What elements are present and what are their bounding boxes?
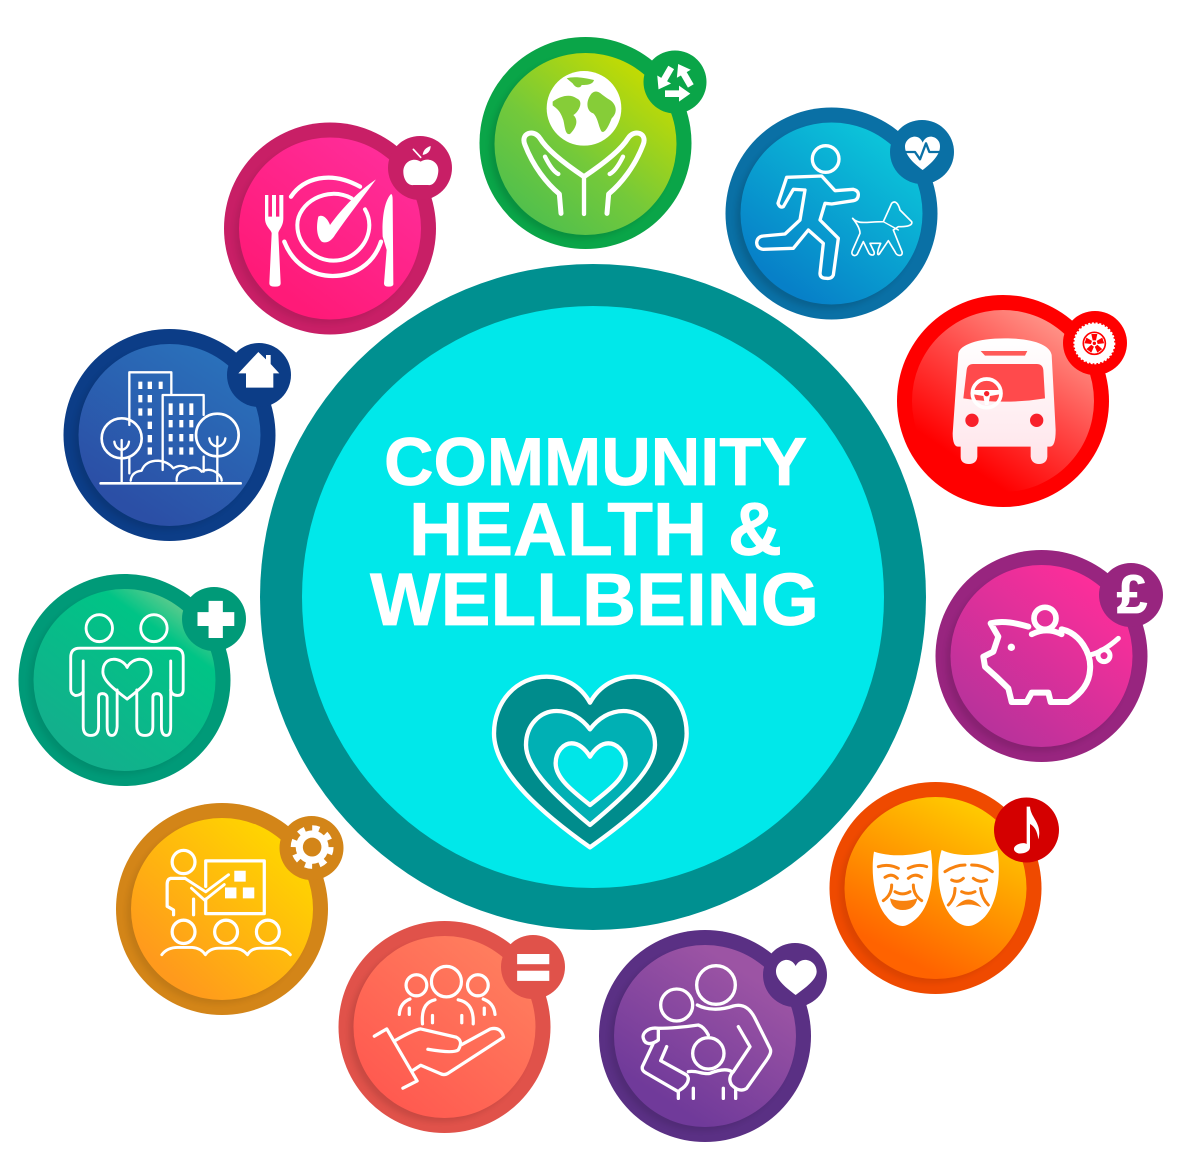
icon: bus	[953, 338, 1056, 464]
badge icon: wheel	[1074, 323, 1114, 363]
icon: teacher and audience	[162, 850, 290, 955]
icon: nested hearts	[494, 677, 687, 847]
panel: family (purple)	[599, 930, 827, 1142]
title: COMMUNITY	[384, 424, 807, 500]
badge icon: music note	[1014, 807, 1039, 853]
badge icon: house	[238, 352, 279, 388]
badge icon: pound sign: £	[1117, 563, 1148, 625]
panel: transport (red)	[897, 295, 1127, 507]
badge icon: heart	[776, 960, 817, 995]
title: HEALTH &	[409, 487, 782, 571]
icon: theatre masks	[873, 850, 999, 926]
panel: active lifestyle (blue)	[726, 108, 954, 320]
icon: buildings and trees	[101, 372, 241, 483]
title: WELLBEING	[370, 558, 819, 641]
central inner disc	[302, 306, 884, 888]
badge icon: plus	[197, 601, 234, 638]
badge icon: equals sign	[517, 954, 549, 981]
badge icon: heart with pulse	[904, 137, 941, 170]
panel: environment (green)	[480, 37, 706, 249]
icon: globe held in hands	[524, 71, 644, 214]
panel: finance (pink purple)	[936, 550, 1163, 762]
badge icon: apple	[403, 146, 438, 185]
panel: arts and culture (orange)	[830, 782, 1059, 994]
panel: relationships (teal green)	[18, 574, 246, 786]
central outer ring	[260, 264, 926, 930]
icon: family embrace	[642, 966, 771, 1098]
panel: skills and education (yellow)	[116, 803, 344, 1015]
badge icon: gear	[294, 828, 331, 866]
panel: healthy eating (pink)	[224, 122, 452, 334]
icon: people in a hand	[374, 966, 504, 1088]
icon: plate, cutlery and tick	[265, 178, 393, 287]
panel: central circle	[260, 264, 926, 930]
panel: housing (navy)	[64, 329, 291, 541]
icon: piggy bank	[983, 607, 1118, 702]
icon: runner and dog	[757, 146, 912, 278]
title	[370, 424, 819, 641]
icon: two people with heart	[71, 615, 183, 735]
badge icon: recycling arrows	[652, 60, 698, 102]
panel: equality (coral)	[338, 921, 565, 1133]
